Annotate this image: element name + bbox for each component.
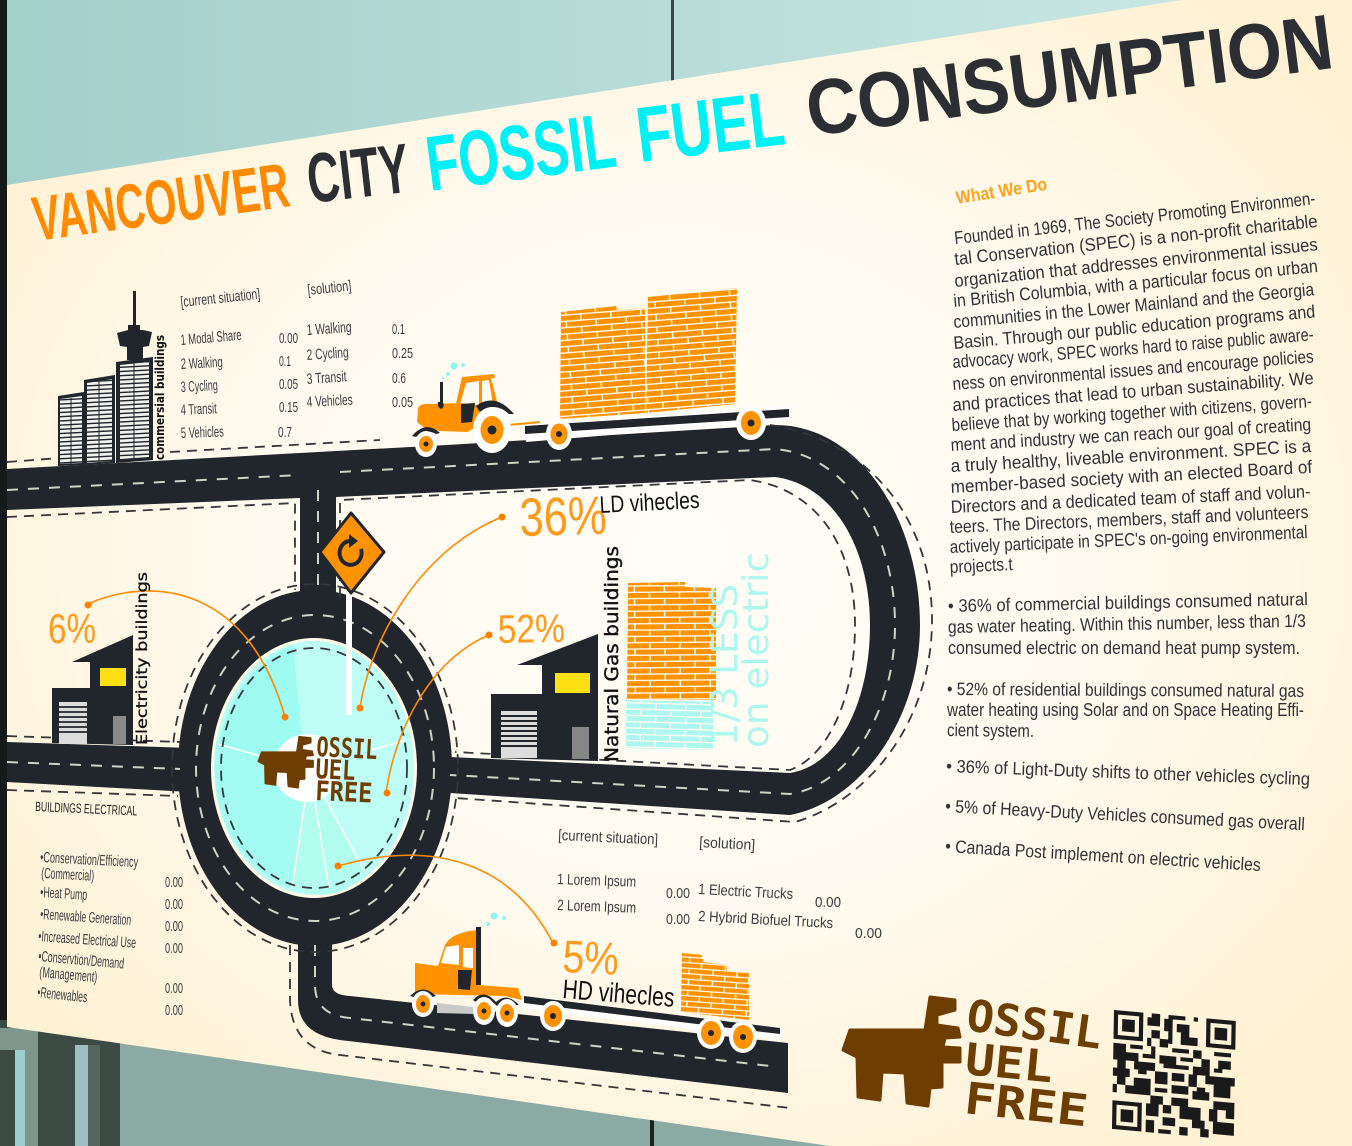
rows: 0.00 xyxy=(855,925,882,942)
road centre dashes xyxy=(7,449,895,1066)
paragraph: a truly healthy, liveable environment. SPEC is a xyxy=(950,436,1313,476)
table rows solution: 0.1 xyxy=(392,321,405,338)
rows: 0.00 xyxy=(815,894,841,911)
list items: (Management) xyxy=(39,964,98,986)
house window xyxy=(100,668,126,686)
centre logo xyxy=(258,732,378,809)
house window xyxy=(555,673,590,693)
label: on electric: on electric xyxy=(736,552,777,748)
list items: (Commercial) xyxy=(41,865,95,885)
table rows current: 1 Modal Share xyxy=(180,327,242,349)
roundabout ring xyxy=(178,590,452,946)
bullet: commercial buildings: gas water heating. Within this number, less than 1/3 xyxy=(948,611,1306,637)
garage door xyxy=(59,702,87,744)
road: top and curve xyxy=(7,425,920,815)
title word: Fuel: FUEL xyxy=(631,73,789,179)
callouts with leader lines xyxy=(48,486,700,1013)
table: commercial modal share xyxy=(180,277,413,442)
table: buildings electrical xyxy=(35,799,183,1019)
trailer bed xyxy=(524,406,790,442)
value: 5%: 5% xyxy=(561,930,620,985)
solution header: [solution] xyxy=(699,834,756,854)
label: one third less: 1/3 LESS xyxy=(705,584,746,746)
trailer wheels xyxy=(546,406,766,450)
paragraph: in British Columbia, with a particular focus on urban xyxy=(952,256,1319,311)
wedge separators xyxy=(218,740,406,888)
table rows current: 2 Walking xyxy=(180,354,223,373)
house door xyxy=(113,716,126,744)
paragraph: and practices that lead to urban sustainability. We xyxy=(952,368,1314,415)
trailer bed xyxy=(522,996,782,1040)
sign pole xyxy=(346,590,352,715)
paragraph: Directors and a dedicated team of staff and volun- xyxy=(950,481,1311,517)
tower spire xyxy=(117,291,152,360)
value: 36%: 36% xyxy=(519,486,607,548)
title word: City: CITY xyxy=(303,129,413,218)
tractor rear wheel xyxy=(473,401,514,453)
road sign xyxy=(320,513,384,715)
brick stack: gas share and electric remainder xyxy=(626,552,777,750)
table rows solution xyxy=(306,319,413,411)
paragraph: member-based society with an elected Board of xyxy=(950,457,1314,497)
pie wedge: 6% electricity xyxy=(218,645,305,768)
house: electricity buildings xyxy=(52,572,151,745)
road edge dashes xyxy=(7,425,932,1108)
office building left xyxy=(58,392,84,466)
list values: 0.00 xyxy=(165,918,183,935)
list items: •Heat Pump xyxy=(40,884,88,904)
list items: •Renewable Generation xyxy=(40,906,132,929)
bullet: commercial buildings: • 36% of commercial buildings consumed natural xyxy=(948,589,1308,616)
table rows current: 5 Vehicles xyxy=(181,424,224,442)
rows: 2 Hybrid Biofuel Trucks xyxy=(698,908,833,932)
trailer hitch xyxy=(508,422,540,425)
pie base: residential and other xyxy=(214,641,414,895)
office building right xyxy=(116,357,153,463)
rows: 1 Lorem Ipsum xyxy=(557,871,636,891)
truck pulling bricks xyxy=(410,912,782,1053)
tractor cabin xyxy=(455,374,498,408)
title word: Fossil: FOSSIL xyxy=(421,96,621,208)
list values: 0.00 xyxy=(165,980,183,997)
list values: 0.00 xyxy=(165,896,183,913)
solution header: [solution] xyxy=(307,277,352,299)
bullet: Canada Post: • Canada Post implement on electric vehicles xyxy=(945,836,1261,875)
heading: What We Do xyxy=(954,174,1048,208)
rows: 1 Electric Trucks xyxy=(698,881,794,903)
bullet: heavy duty: • 5% of Heavy-Duty Vehicles consumed gas overall xyxy=(945,796,1305,834)
rows: 2 Lorem Ipsum xyxy=(557,897,636,917)
logo word: Fossil: OSSIL xyxy=(316,732,378,766)
office building middle xyxy=(84,375,115,465)
label: LD vehicles: LD vihecles xyxy=(599,487,700,519)
teal bricks xyxy=(626,700,713,750)
list items: •Renewables xyxy=(37,984,88,1006)
table rows current: 0.7 xyxy=(278,424,292,441)
table rows current: 3 Cycling xyxy=(180,377,218,396)
table rows current: 0.05 xyxy=(279,376,298,393)
label: commercial buildings: commersial buildings xyxy=(152,335,167,460)
bullet: commercial buildings xyxy=(948,589,1308,658)
table rows solution: 0.05 xyxy=(392,394,413,411)
list items: •Increased Electrical Use xyxy=(38,928,137,952)
current header: [current situation] xyxy=(558,827,658,848)
table rows current: 0.1 xyxy=(279,353,291,370)
paragraph: tal Conservation (SPEC) is a non-profit charitable xyxy=(953,211,1318,269)
list values: 0.00 xyxy=(165,940,183,957)
exhaust bubbles xyxy=(486,912,506,926)
label: natural gas buildings: Natural Gas buildings xyxy=(601,546,623,762)
leader 52 percent xyxy=(384,632,492,796)
paragraph xyxy=(949,188,1319,577)
pie wedge: left large xyxy=(215,742,305,890)
bullet: commercial buildings: consumed electric on demand heat pump system. xyxy=(948,638,1300,658)
table heading: BUILDINGS ELECTRICAL xyxy=(35,799,138,818)
centre white disc xyxy=(273,734,341,802)
table rows solution: 1 Walking xyxy=(306,319,352,339)
table rows solution: 0.6 xyxy=(392,370,406,387)
bullet: residential buildings xyxy=(946,679,1304,741)
table rows solution: 3 Transit xyxy=(306,368,348,388)
table rows current xyxy=(180,327,298,442)
table rows solution: 4 Vehicles xyxy=(306,392,353,411)
list items: •Conservtion/Demand xyxy=(38,948,125,972)
brick stack left xyxy=(560,306,645,419)
table rows current: 0.15 xyxy=(279,399,298,416)
label: HD vehicles: HD vihecles xyxy=(562,974,676,1013)
road: left branch xyxy=(7,742,190,792)
title xyxy=(28,0,1338,255)
tractor door and exhaust xyxy=(438,382,475,423)
truck wheels xyxy=(410,990,757,1053)
rows xyxy=(557,871,882,942)
sign diamond xyxy=(320,513,384,593)
bullet: residential buildings: • 52% of residential buildings consumed natural gas xyxy=(947,679,1304,701)
bullet: residential buildings: cient system. xyxy=(947,720,1034,741)
list values xyxy=(165,874,183,1019)
brick stack xyxy=(681,953,749,1020)
large logo xyxy=(843,990,1105,1137)
logo word: Free: FREE xyxy=(315,776,373,809)
road network xyxy=(7,425,932,1108)
garage door xyxy=(501,711,537,758)
rows: 0.00 xyxy=(666,885,690,902)
pie chart roundabout centre xyxy=(211,638,417,898)
truck cab body xyxy=(415,930,522,1000)
logo deer xyxy=(258,737,313,788)
list items xyxy=(37,849,139,1006)
text: What We Do xyxy=(945,174,1319,875)
leader 6 percent xyxy=(84,591,288,720)
rows: 0.00 xyxy=(666,911,690,928)
paragraph: projects.t xyxy=(949,554,1013,577)
label: electricity buildings: Electricity buildings xyxy=(133,572,151,745)
brick stack right xyxy=(646,288,737,413)
table header: [current situation] xyxy=(180,286,261,311)
logo word: Fossil: OSSIL xyxy=(963,990,1105,1060)
logo deer xyxy=(843,997,960,1106)
tractor pulling bricks xyxy=(412,288,790,457)
QR code xyxy=(1112,1010,1236,1140)
title word: Vancouver: VANCOUVER xyxy=(28,151,294,255)
house door xyxy=(572,727,589,759)
leader 5 percent xyxy=(334,855,558,946)
truck chassis xyxy=(437,1003,473,1014)
exhaust bubbles xyxy=(442,362,465,379)
orange bricks xyxy=(627,582,716,700)
value: 52%: 52% xyxy=(497,607,565,652)
tractor front wheel xyxy=(412,427,440,457)
bullet: light duty: • 36% of Light-Duty shifts to other vehicles cycling xyxy=(946,756,1310,789)
sign arrow xyxy=(340,541,362,565)
table rows current: 4 Transit xyxy=(180,400,218,419)
paragraph: Basin. Through our public education programs and xyxy=(953,301,1316,353)
paragraph: organization that addresses environmental issues xyxy=(953,234,1319,291)
logo word: Fuel: UEL xyxy=(963,1034,1055,1093)
paragraph: teers. The Directors, members, staff and volunteers xyxy=(949,502,1309,537)
list values: 0.00 xyxy=(165,874,183,891)
table rows current: 0.00 xyxy=(279,330,298,347)
pie wedge: 5% bottom xyxy=(293,768,365,894)
leader 36 percent xyxy=(356,514,506,712)
table rows solution: 0.25 xyxy=(392,345,413,362)
road: bottom branch xyxy=(298,920,788,1093)
house: natural gas buildings xyxy=(491,546,623,762)
list items: •Conservation/Efficiency xyxy=(40,849,139,871)
value: 6%: 6% xyxy=(48,605,96,652)
logo word: Free: FREE xyxy=(962,1073,1091,1137)
tractor hood xyxy=(417,403,480,432)
logo word: Fuel: UEL xyxy=(315,754,356,787)
truck windows xyxy=(441,945,473,968)
table rows solution: 2 Cycling xyxy=(306,344,349,364)
commercial buildings xyxy=(58,291,167,466)
list values: 0.00 xyxy=(165,1002,183,1019)
table: heavy duty vehicles xyxy=(557,827,882,942)
truck exhaust and door xyxy=(458,927,481,990)
